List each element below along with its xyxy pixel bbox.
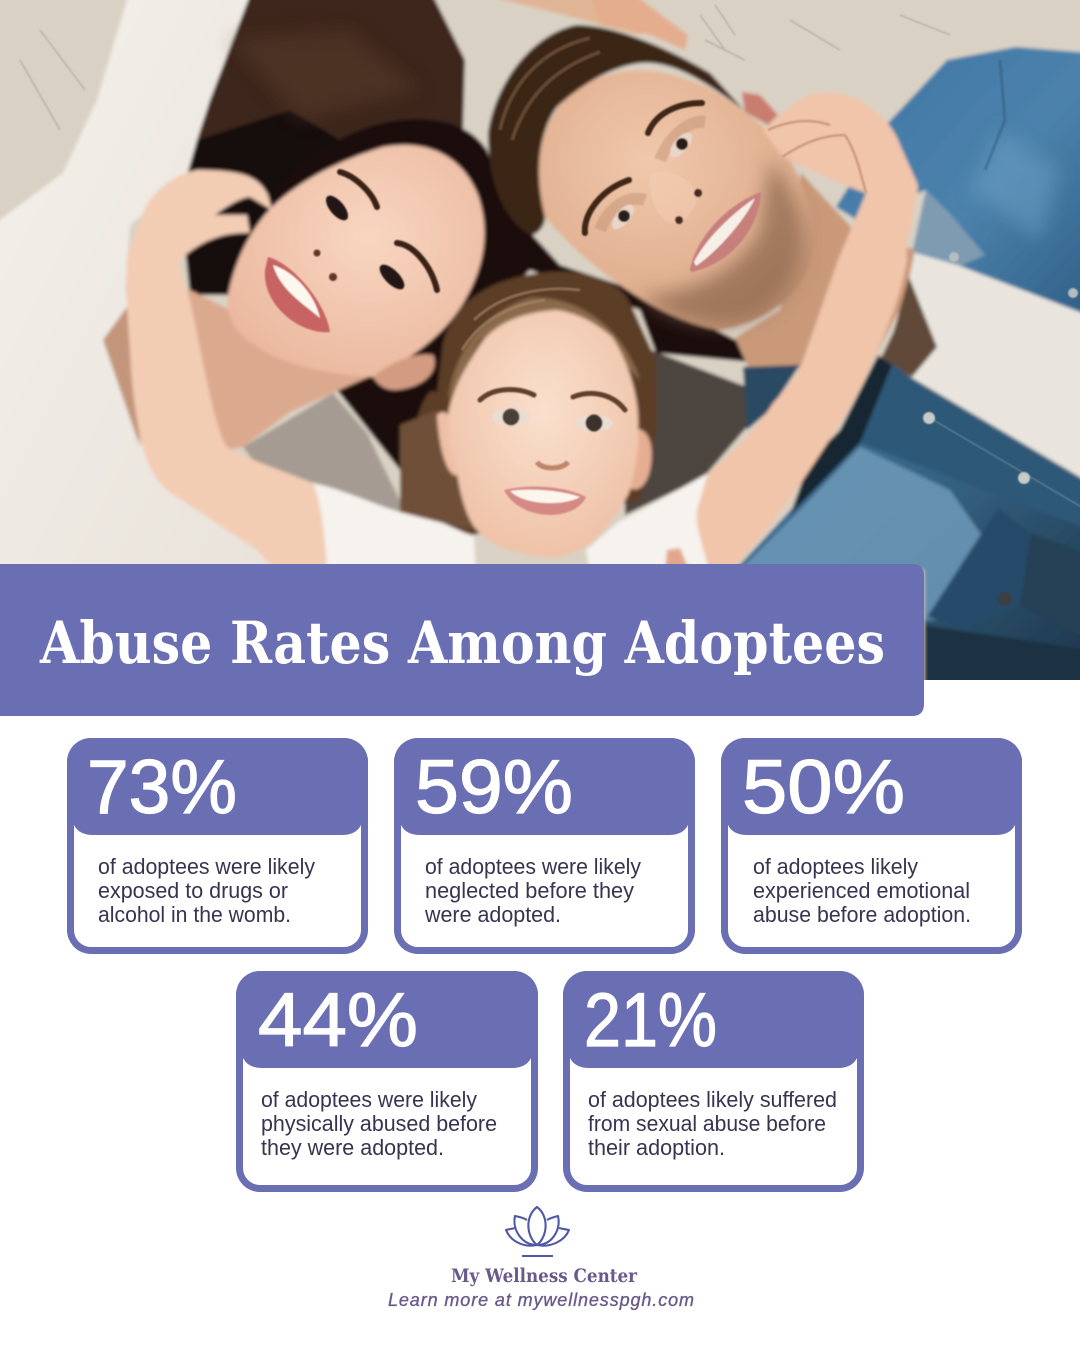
girl's features xyxy=(480,390,625,410)
stat card: 21%: from sexual abuse before xyxy=(588,1111,826,1136)
stat card: 44%: physically abused before xyxy=(261,1111,497,1136)
wood streaks xyxy=(20,5,950,130)
title banner xyxy=(0,564,924,716)
logo: lotus icon xyxy=(506,1207,569,1256)
stat card: 73% xyxy=(67,738,368,954)
stat card: 44%: of adoptees were likely xyxy=(261,1087,477,1112)
man's features xyxy=(585,103,702,233)
stat card: 50%: 50% xyxy=(742,745,905,830)
stat card: 50%: experienced emotional xyxy=(753,878,970,903)
stat card: 44%: they were adopted. xyxy=(261,1135,444,1160)
hair highlights xyxy=(500,38,600,140)
stat card: 21%: of adoptees likely suffered xyxy=(588,1087,837,1112)
stat card: 50% xyxy=(721,738,1022,954)
stat card: 73%: 73% xyxy=(87,745,237,830)
stat card: 59%: neglected before they xyxy=(425,878,634,903)
fingers on the man's face xyxy=(768,121,866,193)
stat card: 59%: 59% xyxy=(415,745,573,830)
photo: smiling family lying on the floor xyxy=(0,0,1080,690)
stat card: 44% xyxy=(236,971,538,1192)
stat card: 21%: 21% xyxy=(584,978,717,1063)
stat card: 50%: abuse before adoption. xyxy=(753,902,971,927)
title: Abuse Rates Among Adoptees xyxy=(39,609,885,677)
stat card: 73%: exposed to drugs or xyxy=(98,878,288,903)
stat card: 73%: alcohol in the womb. xyxy=(98,902,291,927)
stat card: 21% xyxy=(563,971,864,1192)
footer link: Learn more at mywellnesspgh.com xyxy=(388,1290,694,1310)
stat card: 59%: were adopted. xyxy=(424,902,561,927)
stat card: 21%: their adoption. xyxy=(588,1135,725,1160)
stat card: 73%: of adoptees were likely xyxy=(98,854,315,879)
stat card: 59% xyxy=(394,738,695,954)
stat card: 50%: of adoptees likely xyxy=(753,854,918,879)
stat card: 44%: 44% xyxy=(258,978,418,1063)
woman's features xyxy=(340,172,437,290)
stat card: 59%: of adoptees were likely xyxy=(425,854,641,879)
shading xyxy=(640,160,803,324)
denim details xyxy=(985,60,1005,170)
logo wordmark: My Wellness Center xyxy=(451,1265,638,1287)
